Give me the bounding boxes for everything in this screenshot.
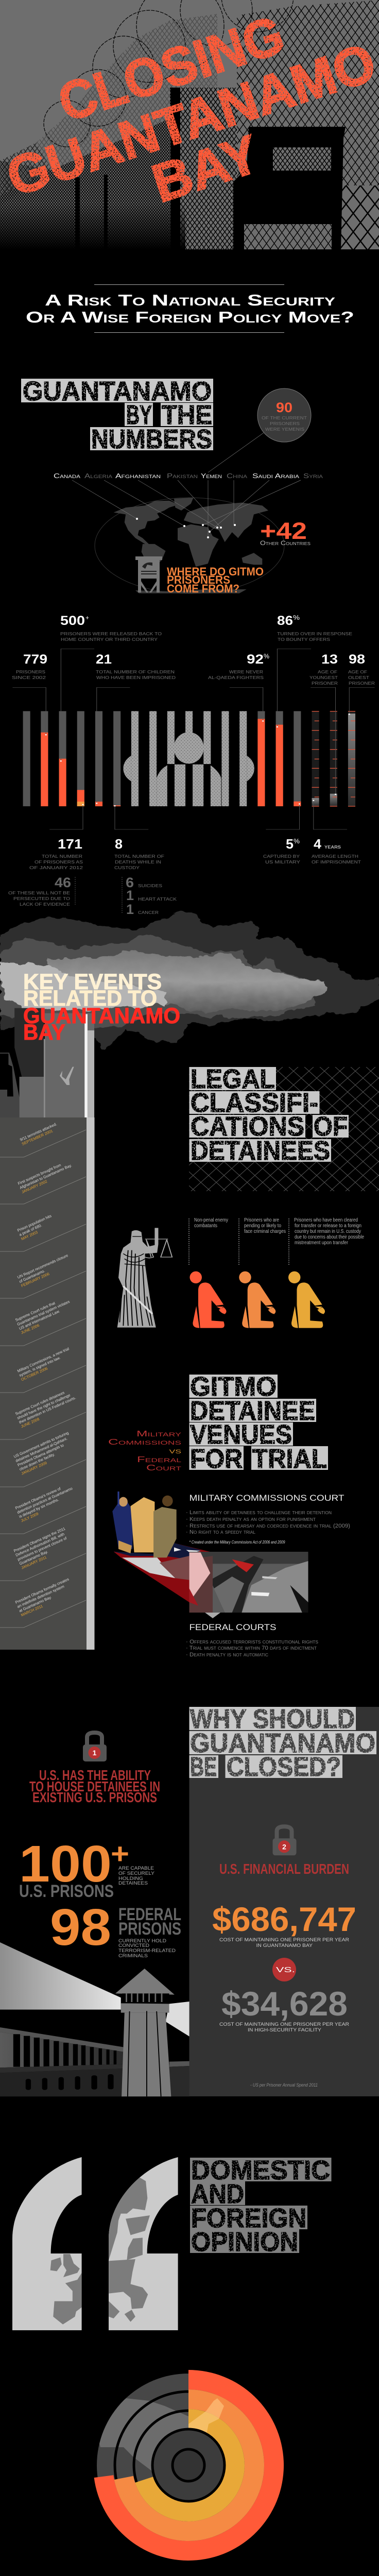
illustration: prison watchtower with searchlights [0, 1942, 190, 2096]
event: torture admission: US Government admits to torturing [13, 1430, 70, 1459]
callout: 90 Yemeni prisoners: WERE YEMENIS [265, 427, 304, 432]
illustration: courtroom with gavel and flag [112, 1492, 308, 1618]
stat: 13 youngest: AGE OF [318, 670, 337, 674]
event: supreme court 2006 [14, 1295, 74, 1335]
heading: gitmo detainee venues for trial: DETAINEE [190, 1396, 315, 1426]
country labels: Syria [303, 472, 323, 480]
event: supreme court 2006: US and International Law. [18, 1309, 61, 1331]
stat: 46 not persecuted: LACK OF EVIDENCE [20, 902, 70, 907]
event: first suspects: Afghanistan to Guantanamo Bay. [19, 1163, 73, 1190]
column: cleared for transfer: due to concerns about their possible [295, 1234, 364, 1240]
event: defence bill: Defence Authorisation Bill, with [15, 1532, 65, 1557]
event: military commissions: Military Commissions, a new trial [16, 1346, 70, 1374]
label: military commissions vs federal court: Commissions [108, 1438, 181, 1447]
heading: legal classifications of detainees: CATIONS [191, 1112, 304, 1142]
event: torture admission: JANUARY 2009 [21, 1461, 47, 1476]
label: military commissions vs federal court [108, 1430, 182, 1472]
event: indefinite detention: an indefinite detention system [16, 1584, 65, 1609]
heading: domestic and foreign opinion: DOMESTIC [191, 2156, 330, 2185]
stat: 500+ released: 500 [60, 614, 85, 628]
callout: 90 Yemeni prisoners: PRISONERS [270, 421, 300, 426]
text: federal courts: · Offers accused terrorists constitutional rights [186, 1639, 318, 1645]
stat: plus 42 other countries: Other Countries [260, 539, 311, 547]
stat: cost in high-security facility: COST OF MAINTAINING ONE PRISONER PER YEAR [219, 2022, 350, 2027]
column: pending charges: Prisoners who are [244, 1217, 279, 1223]
subtitle [26, 284, 354, 333]
stat: 92% never fighters: AL-QAEDA FIGHTERS [208, 675, 264, 680]
stat: 46 not persecuted: 46 [55, 875, 71, 890]
stats above bars [12, 614, 375, 686]
heading: legal classifications of detainees: DETAINEES [191, 1136, 330, 1166]
courtroom photo [160, 1552, 308, 1618]
event: prison population: MAY 2003 [20, 1230, 39, 1241]
stat: 171 prisoners: OF PRISONERS AS [35, 860, 83, 865]
event: 9/11: SEPTEMBER 2001 [21, 1128, 54, 1146]
stat: 92% never fighters: 92 [247, 652, 264, 667]
text: military commissions court: MILITARY COMMISSIONS COURT [190, 1493, 344, 1503]
heading: why should guantanamo be closed: CLOSED? [227, 1752, 341, 1782]
stat: 92% never fighters: % [264, 652, 269, 660]
event: defence bill [13, 1526, 74, 1570]
heading: where do gitmo prisoners come from: WHERE DO GITMO [167, 565, 264, 578]
event: indefinite detention [14, 1577, 76, 1617]
stat: 8 deaths [114, 836, 164, 870]
stat: 8 deaths: DEATHS WHILE IN [115, 860, 161, 865]
stat: causes of death: 1 [126, 902, 134, 917]
stat: 8 deaths: 8 [115, 836, 123, 852]
stat: 100+ U.S. prisons: HOLDING [118, 1876, 143, 1881]
stat: 98 federal prisons: CURRENTLY HOLD [118, 1938, 167, 1943]
event: prison population [16, 1213, 56, 1241]
event: supreme court 2006: Guantanamo trial system violates [16, 1299, 71, 1327]
illustration: smoke and twin towers [0, 912, 379, 1118]
stat: 100+ U.S. prisons: OF SECURELY [118, 1871, 154, 1876]
subtitle: A Risk To National Security [45, 291, 335, 309]
stat: 100+ U.S. prisons: ARE CAPABLE [118, 1866, 154, 1871]
stat: causes of death: HEART ATTACK [138, 897, 177, 902]
column: non-penal combatants: Non-penal enemy [194, 1217, 228, 1223]
stat: 171 prisoners [29, 836, 83, 870]
stat: 86% bounty: % [293, 614, 300, 621]
title: Closing Guantanamo Bay: GUANTANAMO [0, 32, 379, 208]
event: 9/11: 9/11 terrorists attacked. [19, 1122, 58, 1142]
stat: 98 oldest: 98 [349, 652, 365, 667]
stat: plus 42 other countries: +42 [260, 518, 307, 544]
heading: gitmo detainee venues for trial: VENUES [190, 1420, 292, 1450]
event: review delayed: President Obama's review of [14, 1486, 62, 1511]
heading: why should guantanamo be closed: BE [190, 1752, 217, 1782]
stat: 5% captured: 5 [286, 836, 294, 852]
label: military commissions vs federal court: Military [136, 1430, 182, 1438]
stat: 8 deaths: TOTAL NUMBER OF [114, 854, 164, 859]
ring: 70% [135, 2409, 245, 2521]
badge: vs [272, 1958, 296, 1981]
country labels: China [227, 472, 247, 480]
event: defence bill: provisions to prevent closure of [16, 1535, 68, 1562]
stat: causes of death: CANCER [138, 910, 159, 915]
column: cleared for transfer: country but remain in U.S. custody [295, 1229, 361, 1234]
stat: 4 years: AVERAGE LENGTH [312, 854, 358, 859]
stat: 21 children: 21 [96, 652, 112, 667]
stat: 779 prisoners: SINCE 2002 [12, 675, 46, 680]
event: defence bill: Guantanamo Bay. [19, 1549, 49, 1566]
callout: 90 Yemeni prisoners: 90 [276, 400, 292, 415]
event: first suspects: First suspects brought from [17, 1163, 62, 1186]
stat: 86% bounty: TO BOUNTY OFFERS [278, 637, 330, 642]
heading: domestic and foreign opinion: AND [191, 2179, 244, 2209]
event: indefinite detention: MARCH 2011 [20, 1604, 44, 1617]
stat: cost in high-security facility: $34,628 [221, 1985, 348, 2023]
label: military commissions vs federal court: Federal [137, 1455, 181, 1464]
stat: 13 youngest: 13 [321, 652, 338, 667]
event: review delayed: JULY 2009 [20, 1511, 39, 1523]
stat: 500+ released: PRISONERS WERE RELEASED BACK TO [60, 632, 162, 636]
stat: 98 federal prisons: TERRORISM-RELATED [118, 1948, 176, 1953]
stat: causes of death: 6 [126, 875, 134, 890]
stat: cost at Guantanamo: $686,747 [212, 1900, 356, 1938]
callout: 90 Yemeni prisoners [257, 388, 311, 442]
icon: opening quotes with map of Europe [12, 2157, 178, 2330]
event: review delayed: is delayed by six months. [18, 1497, 60, 1519]
stat: 46 not persecuted: OF THESE WILL NOT BE [8, 891, 70, 895]
panel: U.S. financial burden background [190, 1707, 379, 2096]
event: indefinite detention: President Obama formally creates [14, 1577, 70, 1605]
stat: cost at Guantanamo: IN GUANTANAMO BAY [256, 1943, 313, 1948]
text: military commissions court: · Limits ability of detainees to challenge their detention [186, 1510, 332, 1516]
heading: key events: KEY EVENTS [23, 970, 162, 994]
event: UN report: UN Report recommends closure [16, 1253, 69, 1280]
column: pending charges: face criminal charges [244, 1229, 286, 1234]
heading: gitmo detainee venues for trial: GITMO [190, 1372, 277, 1402]
stat: 98 oldest: OLDEST [348, 675, 369, 680]
stat: 5% captured [263, 836, 301, 865]
column: pending charges [239, 1217, 286, 1266]
event: torture admission: detainee Mohammed al-Qahtani. [15, 1436, 68, 1463]
heading: key events: BAY [23, 1020, 65, 1045]
title: Closing Guantanamo Bay: BAY [145, 124, 266, 214]
stat: 779 prisoners: PRISONERS [16, 670, 45, 674]
stat: 98 federal prisons: 98 [50, 1899, 111, 1956]
column: cleared for transfer: mistreatment upon transfer [295, 1240, 349, 1246]
heading: legal classifications of detainees: LEGAL [191, 1064, 275, 1094]
stat: 779 prisoners [12, 652, 47, 680]
heading: key events: RELATED TO [23, 986, 157, 1011]
stat: 4 years: YEARS [324, 845, 341, 850]
label: military commissions vs federal court: Court [146, 1464, 181, 1472]
heading: domestic and foreign opinion: FOREIGN [191, 2204, 306, 2233]
heading: U.S. has the ability [29, 1767, 160, 1805]
stat: 92% never fighters: WERE NEVER [229, 670, 263, 674]
icon: kneeling prisoner red [190, 1272, 227, 1328]
stat: 100+ U.S. prisons: U.S. PRISONS [19, 1882, 114, 1901]
stat: cost in high-security facility: - US per Prisoner Annual Spend 2011 [250, 2082, 318, 2088]
column: non-penal combatants [189, 1217, 228, 1266]
heading: Guantanamo by the numbers: THE [162, 400, 212, 430]
stat: 500+ released: HOME COUNTRY OR THIRD COUNTRY [61, 637, 158, 642]
heading: legal classifications of detainees: CLASSIFI- [191, 1088, 318, 1118]
event: supreme court 2008 [14, 1387, 78, 1429]
stat: 100+ U.S. prisons [19, 1835, 154, 1901]
event: supreme court 2006: JUNE 2006 [20, 1323, 40, 1335]
icon: kneeling prisoner orange [239, 1272, 275, 1328]
hero: fence and watchtower illustration [0, 0, 379, 249]
heading: why should guantanamo be closed: GUANTANAMO [190, 1728, 375, 1758]
bar chart: statistics shown as prison bars [12, 649, 375, 829]
event: torture admission: President Obama attempts to [16, 1443, 64, 1467]
heading: Guantanamo by the numbers: GUANTANAMO [23, 377, 212, 406]
icon: padlock 1: 1 [93, 1749, 97, 1757]
heading: where do gitmo prisoners come from: COME FROM? [167, 582, 239, 595]
heading: why should guantanamo be closed [190, 1704, 376, 1782]
stat: 21 children: TOTAL NUMBER OF CHILDREN [96, 670, 175, 674]
stat: 98 oldest [348, 652, 375, 686]
heading: where do gitmo prisoners come from: PRISONERS [167, 573, 230, 586]
stat: 13 youngest: YOUNGEST [309, 675, 338, 680]
event: defence bill: President Obama signs the 2011 [13, 1526, 66, 1553]
stats below bars [8, 836, 361, 917]
event: torture admission [13, 1430, 77, 1476]
chart: concentric approval rings [93, 2370, 284, 2561]
leader lines [12, 649, 375, 829]
columns: detainee classifications [189, 1217, 364, 1266]
stat: 171 prisoners: OF JANUARY 2012 [29, 866, 83, 870]
prisoner silhouette behind bars [123, 711, 254, 806]
text: military commissions court: · Keeps death penalty as an option for punishment [186, 1516, 316, 1522]
text: military commissions court: · Restricts use of hearsay and coerced evidence in trial (2009) [186, 1523, 350, 1529]
text: military commissions court [186, 1493, 350, 1545]
title: Closing Guantanamo Bay: CLOSING [51, 5, 291, 133]
stat: 779 prisoners: 779 [23, 652, 47, 667]
label: military commissions vs federal court: vs [169, 1447, 181, 1455]
event: review delayed [14, 1482, 77, 1523]
stat: cost in high-security facility [219, 1985, 350, 2088]
chart: world map of prisoner origins [72, 433, 301, 594]
icon: kneeling prisoner yellow [288, 1272, 325, 1328]
stat: causes of death: 1 [126, 888, 134, 903]
text: federal courts [186, 1622, 318, 1658]
stat: 46 not persecuted: PERSECUTED DUE TO [13, 896, 70, 901]
event: first suspects: JANUARY 2002 [21, 1179, 48, 1194]
heading: gitmo detainee venues for trial: TRIAL [252, 1444, 327, 1474]
event: military commissions: system, is signed into law. [19, 1355, 61, 1378]
stat: 98 federal prisons: CRIMINALS [118, 1953, 148, 1958]
stat: 13 youngest [309, 652, 338, 686]
event: supreme court 2006: Supreme Court rules that [14, 1300, 56, 1323]
stat: 100+ U.S. prisons: 100 [19, 1835, 112, 1893]
heading: gitmo detainee venues for trial: FOR [190, 1444, 243, 1474]
event: supreme court 2008: JUNE 2008 [20, 1417, 40, 1429]
heading: gitmo detainee venues for trial [190, 1372, 328, 1474]
heading: U.S. has the ability: U.S. HAS THE ABILITY [39, 1767, 151, 1783]
stat: causes of death [122, 875, 177, 917]
stat: 98 federal prisons: PRISONS [118, 1919, 181, 1939]
text: military commissions court: * Created under the Military Commissions Act of 2006 and 2009 [190, 1540, 285, 1545]
heading: where do gitmo prisoners come from [167, 565, 264, 595]
soldier, podium and official [112, 1501, 133, 1549]
icon: padlock 2: 2 [282, 1842, 286, 1851]
heading: Guantanamo by the numbers: NUMBERS [91, 425, 212, 454]
stat: 5% captured: CAPTURED BY [263, 854, 300, 859]
subtitle: Or A Wise Foreign Policy Move? [26, 308, 354, 326]
stat: causes of death: SUICIDES [138, 884, 162, 888]
stat: 92% never fighters [208, 652, 269, 680]
heading: key events: GUANTANAMO [23, 1004, 180, 1028]
event: UN report: of Guantanamo. [19, 1268, 46, 1284]
icon: padlock 2 [273, 1826, 297, 1855]
heading: key events [23, 970, 180, 1045]
country labels: Canada [54, 472, 80, 480]
icons: three kneeling prisoners [190, 1272, 325, 1328]
callout: 90 Yemeni prisoners: OF THE CURRENT [262, 416, 307, 420]
stat: cost at Guantanamo: COST OF MAINTAINING ONE PRISONER PER YEAR [219, 1937, 350, 1942]
country labels [54, 472, 323, 480]
event: review delayed: detention practices at Guantanamo [16, 1486, 73, 1515]
heading: legal classifications of detainees [189, 1064, 379, 1191]
event: UN report: FEBRUARY 2006 [20, 1272, 50, 1288]
text: federal courts: · Trial must commence within 70 days of indictment [186, 1645, 317, 1651]
icon: guard tower [135, 556, 162, 592]
stat: 98 federal prisons: CONVICTED [118, 1943, 150, 1948]
event: military commissions: OCTOBER 2006 [20, 1366, 48, 1382]
event: prison population: a peak of 680. [19, 1223, 43, 1237]
stat: 100+ U.S. prisons: + [111, 1837, 129, 1870]
column: cleared for transfer: for transfer or release to a foreign [295, 1223, 361, 1229]
panel: timeline of key events [0, 1117, 95, 1650]
stat: 100+ U.S. prisons: DETAINEES [118, 1880, 148, 1886]
stat: 5% captured: US MILITARY [265, 860, 301, 865]
stat: 86% bounty: 86 [277, 614, 293, 628]
stat: 21 children: WHO HAVE BEEN IMPRISONED [96, 675, 176, 680]
heading: Guantanamo by the numbers: BY [126, 400, 152, 430]
stat: 500+ released: + [85, 614, 89, 621]
heading: domestic and foreign opinion [190, 2156, 332, 2257]
event: supreme court 2008: their detention in US Federal courts. [18, 1395, 77, 1425]
country labels: Pakistan [167, 472, 198, 480]
stat: cost in high-security facility: IN HIGH-SECURITY FACILITY [248, 2027, 321, 2032]
text: military commissions court: · No right to a speedy trial [186, 1529, 256, 1535]
heading: Guantanamo by the numbers [21, 377, 213, 454]
column: non-penal combatants: combatants [194, 1223, 217, 1229]
event: defence bill: JANUARY 2011 [21, 1555, 47, 1570]
stat: 86% bounty [277, 614, 352, 642]
badge: vs: VS. [276, 1965, 295, 1974]
ring: 73% [94, 2370, 284, 2561]
stat: 98 oldest: AGE OF [348, 670, 367, 674]
icon: padlock 1 [83, 1733, 107, 1761]
stat: 500+ released [60, 614, 162, 642]
event: supreme court 2008: Supreme Court rules detainees [14, 1390, 65, 1416]
ring: 72% [114, 2389, 264, 2541]
heading: U.S. has the ability: EXISTING U.S. PRISONS [32, 1789, 157, 1805]
column: pending charges: pending or likely to [244, 1223, 281, 1229]
stat: 98 oldest: PRISONER [349, 681, 375, 686]
stat: 86% bounty: TURNED OVER IN RESPONSE [277, 632, 352, 636]
event: indefinite detention: at Guantanamo Bay. [18, 1595, 52, 1613]
country labels: Algeria [84, 472, 112, 480]
text: federal courts: FEDERAL COURTS [190, 1622, 276, 1632]
stat: 98 federal prisons [50, 1899, 181, 1958]
illustration: lady justice statue [117, 1228, 172, 1328]
heading: U.S. has the ability: TO HOUSE DETAINEES IN [29, 1778, 160, 1794]
stat: 171 prisoners: TOTAL NUMBER [42, 854, 82, 859]
country labels: Afghanistan [115, 472, 161, 480]
event: prison population: Prison population hits [16, 1213, 53, 1233]
heading: domestic and foreign opinion: OPINION [191, 2227, 298, 2257]
stat: 13 youngest: PRISONER [312, 681, 338, 686]
stat: 98 federal prisons: FEDERAL [118, 1905, 181, 1924]
stat: 8 deaths: CUSTODY [114, 866, 140, 870]
stat: 21 children [96, 652, 176, 680]
country labels: Saudi Arabia [252, 472, 299, 480]
column: cleared for transfer: Prisoners who have been cleared [294, 1217, 358, 1223]
stat: 4 years [312, 836, 361, 865]
stat: 4 years: 4 [314, 836, 322, 852]
stat: 5% captured: % [294, 837, 300, 845]
text: federal courts: · Death penalty is not automatic [186, 1652, 268, 1658]
stat: 46 not persecuted [8, 875, 75, 907]
heading: why should guantanamo be closed: WHY SHOULD [190, 1704, 355, 1734]
stat: 171 prisoners: 171 [58, 836, 82, 852]
stat: 4 years: OF IMPRISONMENT [312, 860, 361, 865]
column: cleared for transfer [289, 1217, 364, 1266]
country labels: Yemen [201, 472, 222, 480]
event: supreme court 2008: should have the right to challenge [16, 1393, 71, 1420]
event: torture admission: close down the facility. [19, 1452, 56, 1471]
heading: legal classifications of detainees: OF [314, 1112, 348, 1142]
